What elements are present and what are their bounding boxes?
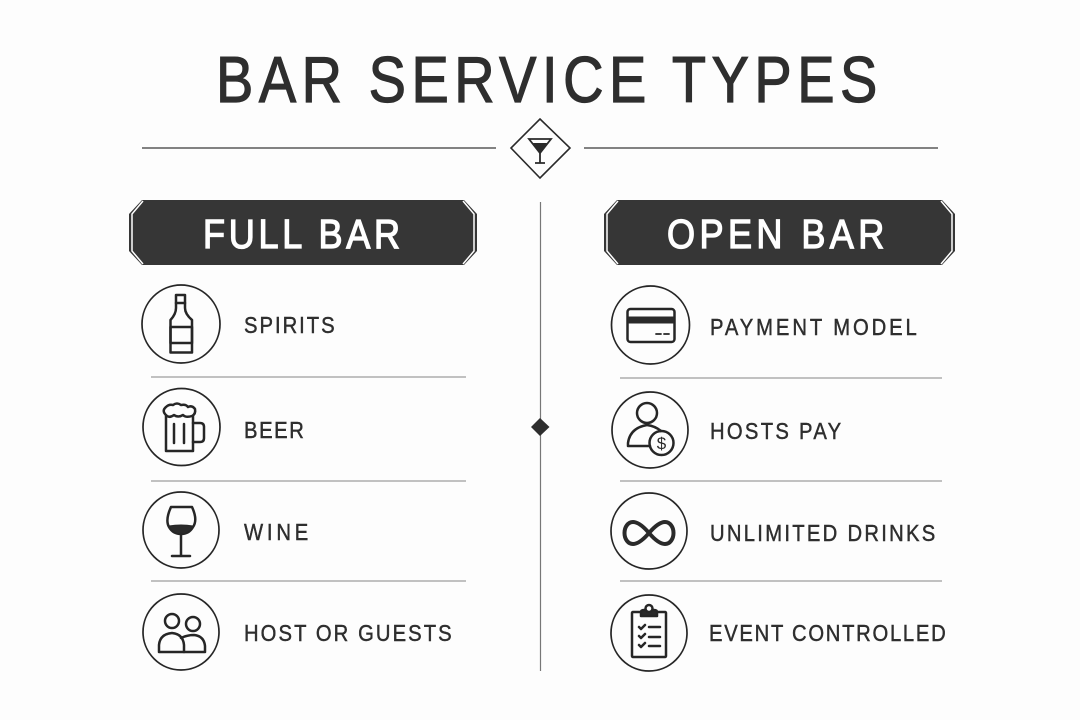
center vertical divider <box>531 202 550 671</box>
item: event controlled: EVENT CONTROLLED <box>709 620 946 646</box>
heading badge: full bar: FULL BAR <box>203 212 400 258</box>
icon: infinity <box>624 522 674 544</box>
item: hosts pay <box>612 392 841 468</box>
item: beer <box>143 388 304 466</box>
item: unlimited drinks <box>611 493 935 569</box>
heading badge: open bar: OPEN BAR <box>667 212 884 258</box>
item: wine <box>143 492 308 568</box>
icon: person with dollar coin: $ <box>657 434 667 453</box>
icon: beer mug <box>164 404 204 451</box>
heading badge: full bar <box>129 200 477 265</box>
icon: person with dollar coin <box>628 403 674 455</box>
item: spirits: SPIRITS <box>244 312 335 338</box>
icon: bottle <box>170 295 192 352</box>
item: wine: WINE <box>244 519 308 545</box>
icon: wine glass <box>167 507 195 556</box>
header divider with cocktail emblem <box>142 119 938 178</box>
item: payment model <box>612 286 917 364</box>
item: spirits <box>142 285 335 363</box>
title: BAR SERVICE TYPES <box>216 43 877 116</box>
icon: credit card <box>628 309 674 342</box>
item: unlimited drinks: UNLIMITED DRINKS <box>710 520 935 546</box>
panel: full bar <box>129 200 477 670</box>
item: hosts pay: HOSTS PAY <box>710 418 841 444</box>
item: host or guests <box>143 594 452 670</box>
heading badge: open bar <box>604 200 955 265</box>
icon: two people <box>159 614 205 652</box>
panel: open bar <box>604 200 955 671</box>
item: beer: BEER <box>244 417 304 443</box>
item: host or guests: HOST OR GUESTS <box>244 620 452 646</box>
item: payment model: PAYMENT MODEL <box>710 314 917 340</box>
icon: clipboard checklist <box>632 605 666 657</box>
item: event controlled <box>611 595 946 671</box>
